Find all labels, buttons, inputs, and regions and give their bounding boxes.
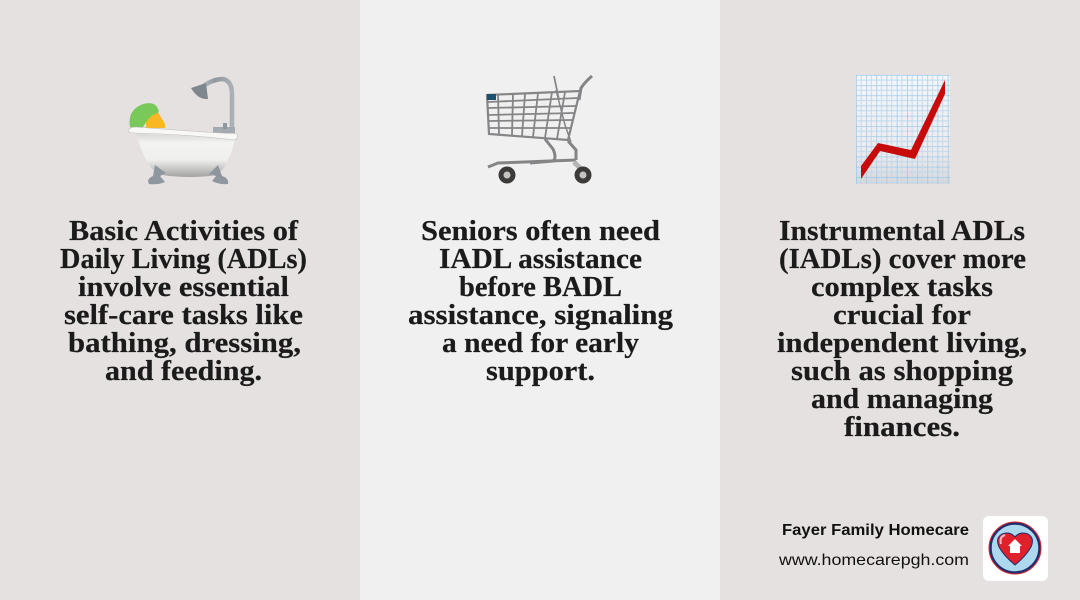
heading: early support text: before BADL (459, 271, 622, 303)
heading: early support text: a need for early (442, 327, 640, 359)
heading: instrumental ADLs text: independent living, (777, 327, 1027, 359)
heading: basic ADLs text: and feeding. (105, 355, 262, 387)
website: www.homecarepgh.com (778, 552, 969, 569)
heading: early support text: support. (486, 355, 595, 387)
heading: early support text: IADL assistance (439, 243, 642, 275)
panel: instrumental ADLs (720, 0, 1080, 600)
heading: early support text: Seniors often need (421, 215, 660, 247)
logo (983, 516, 1048, 581)
heading: instrumental ADLs text: finances. (844, 411, 960, 443)
heading: instrumental ADLs text: such as shopping (791, 355, 1014, 387)
heading: basic ADLs text: Daily Living (ADLs) (60, 243, 307, 275)
heading: early support text: assistance, signaling (408, 299, 674, 331)
heading: instrumental ADLs text: complex tasks (811, 271, 993, 303)
heading: basic ADLs text: involve essential (78, 271, 289, 303)
heading: basic ADLs text (60, 215, 307, 387)
icon: rising chart (856, 75, 950, 184)
icon: shopping cart (487, 76, 592, 184)
heading: instrumental ADLs text: Instrumental ADLs (779, 215, 1025, 247)
heading: basic ADLs text: Basic Activities of (69, 215, 298, 247)
panel: early support (360, 0, 720, 600)
heading: basic ADLs text: self-care tasks like (64, 299, 303, 331)
heading: instrumental ADLs text: (IADLs) cover more (779, 243, 1026, 275)
brand name: Fayer Family Homecare (782, 522, 969, 539)
panel: basic ADLs (0, 0, 360, 600)
heading: instrumental ADLs text (777, 215, 1027, 443)
heading: instrumental ADLs text: crucial for (833, 299, 971, 331)
icon: person in bathtub (128, 79, 238, 184)
heading: early support text (408, 215, 674, 387)
heading: basic ADLs text: bathing, dressing, (68, 327, 301, 359)
heading: instrumental ADLs text: and managing (811, 383, 994, 415)
